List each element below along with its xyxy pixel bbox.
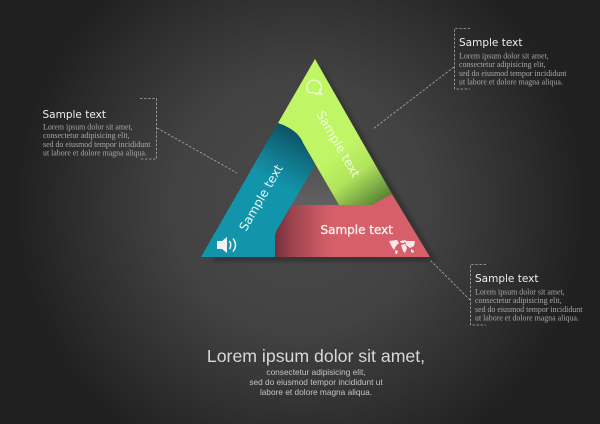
callout: bottom right: [430, 260, 583, 325]
bottom right body text: sed do eiusmod tempor incididunt: [475, 305, 583, 314]
top right body text: Lorem ipsum dolor sit amet,: [459, 52, 549, 60]
left heading: Sample text: [42, 109, 106, 121]
icon: world map: [389, 240, 415, 254]
left body text: ut labore et dolore magna aliqua.: [43, 148, 147, 158]
panel: red segment: [275, 194, 430, 257]
callout: top right: [373, 28, 567, 129]
left body text: consectetur adipisicing elit,: [43, 131, 130, 140]
top right body text: sed do eiusmod tempor incididunt: [459, 69, 567, 78]
red label: Sample text: [320, 223, 393, 237]
green label: Sample text: [313, 108, 363, 180]
top right heading: Sample text: [459, 37, 522, 49]
left body text: sed do eiusmod tempor incididunt: [43, 140, 151, 149]
callout: left: [42, 98, 237, 173]
left leader line: [157, 128, 237, 173]
icon: speech bubble: [307, 80, 322, 94]
bottom right body text: ut labore et dolore magna aliqua.: [475, 314, 579, 322]
bottom right body text: Lorem ipsum dolor sit amet,: [475, 288, 565, 296]
top right body text: consectetur adipisicing elit,: [459, 60, 546, 69]
triangle centre: [285, 160, 345, 208]
top right bracket: [454, 28, 470, 89]
top right body text: ut labore et dolore magna aliqua.: [459, 78, 563, 86]
left body text: Lorem ipsum dolor sit amet,: [43, 122, 133, 132]
bottom right leader line: [430, 260, 470, 300]
top right leader line: [373, 67, 454, 129]
panel: teal segment: [201, 123, 315, 257]
footer title: Lorem ipsum dolor sit amet,: [207, 346, 425, 366]
left bracket: [140, 98, 156, 159]
icon: speaker: [217, 237, 236, 253]
bottom right body text: consectetur adipisicing elit,: [475, 296, 562, 305]
footer body text: sed do eiusmod tempor incididunt ut: [249, 377, 383, 387]
triangle shadow: [212, 66, 438, 262]
footer body text: consectetur adipisicing elit,: [266, 367, 366, 377]
teal label: Sample text: [236, 162, 286, 234]
panel: green segment: [278, 59, 392, 205]
bottom right heading: Sample text: [475, 273, 538, 285]
footer body text: labore et dolore magna aliqua.: [260, 387, 372, 397]
bottom right bracket: [470, 264, 486, 325]
